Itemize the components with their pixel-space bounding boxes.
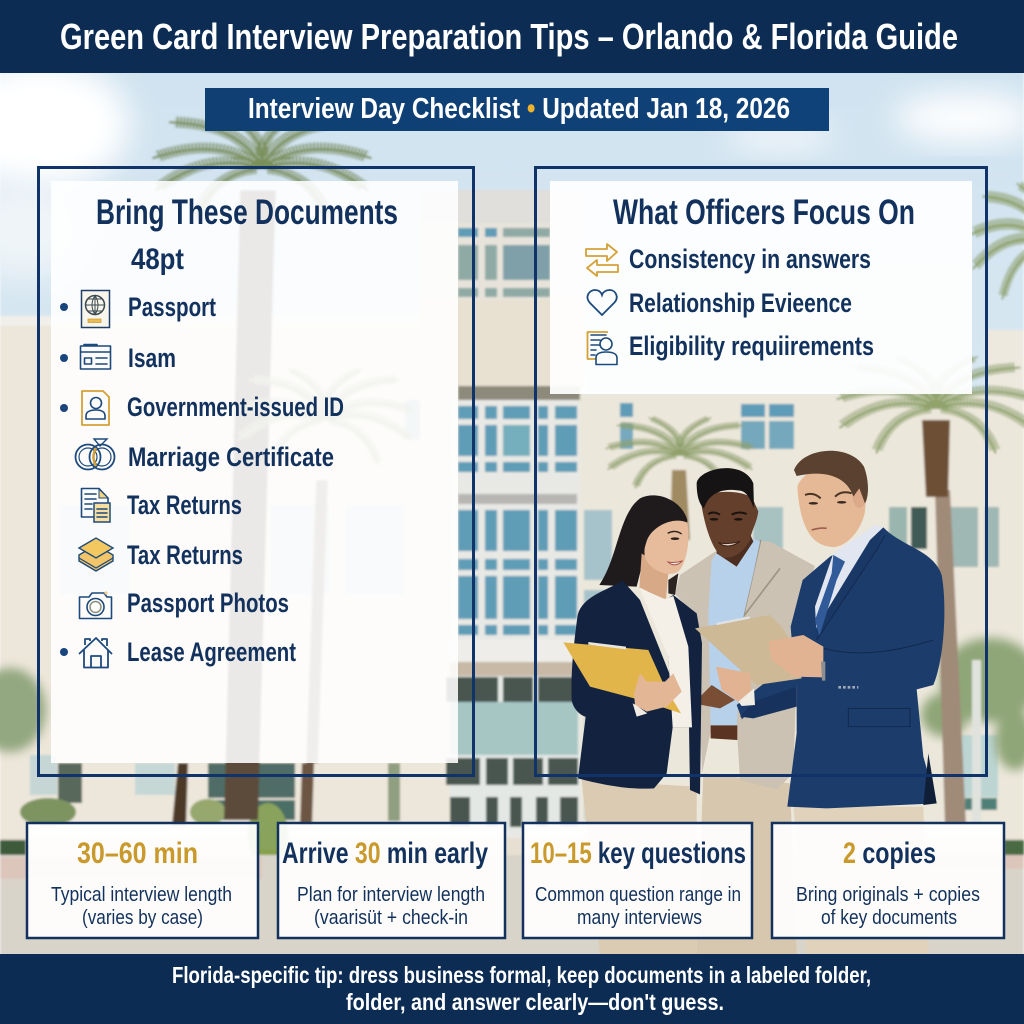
florida tip: Florida-specific tip: dress business formal, keep documents in a labeled folder, xyxy=(172,962,871,988)
stat value: Arrive 30 min early xyxy=(282,837,488,870)
item: consistency xyxy=(586,244,871,276)
subheading bar xyxy=(205,88,829,131)
left white panel backing xyxy=(51,181,458,763)
stat card: 2 copies xyxy=(772,823,1004,938)
stray label 48pt: 48pt xyxy=(131,243,184,276)
panel: bring these documents xyxy=(60,193,398,668)
header banner xyxy=(0,0,1024,73)
heading: documents: Bring These Documents xyxy=(96,193,398,232)
stat caption: (vaarisüt + check-in xyxy=(314,907,468,929)
item: isam xyxy=(60,343,176,373)
date line: Interview Day Checklist • Updated Jan 18, 2026 xyxy=(248,93,790,125)
ground xyxy=(0,838,1024,860)
item: government-issued id: Government-issued ID xyxy=(127,392,344,422)
item: lease agreement xyxy=(60,637,296,668)
stat card: 30-60 min xyxy=(27,823,258,938)
stat caption: Plan for interview length xyxy=(297,884,485,906)
item: isam: Isam xyxy=(128,343,176,373)
stat value: 10–15 key questions xyxy=(530,837,746,870)
heading: officers: What Officers Focus On xyxy=(613,193,915,232)
right palms xyxy=(670,470,690,540)
florida tip: folder, and answer clearly—don't guess. xyxy=(346,989,724,1015)
stat caption: Typical interview length xyxy=(51,884,232,906)
middle man xyxy=(675,468,815,954)
right wing xyxy=(580,394,1024,858)
item: passport xyxy=(60,290,216,328)
stat card: key questions xyxy=(523,823,752,938)
item: eligibility requirements xyxy=(588,331,874,364)
left wing xyxy=(0,316,470,856)
woman xyxy=(563,495,702,954)
item: marriage certificate: Marriage Certificate xyxy=(128,442,334,472)
item: eligibility requirements: Eligibility requiirements xyxy=(629,331,874,361)
item: marriage certificate xyxy=(76,439,334,472)
item: passport photos xyxy=(80,588,289,618)
stat caption: Bring originals + copies xyxy=(796,884,980,906)
left palm xyxy=(224,190,276,820)
item: tax returns xyxy=(82,488,242,522)
item: relationship evidence: Relationship Evieence xyxy=(629,288,852,318)
item: passport photos: Passport Photos xyxy=(127,588,289,618)
stat caption: (varies by case) xyxy=(82,907,203,929)
stat card: arrive early xyxy=(278,823,505,938)
three professionals reviewing documents xyxy=(563,451,944,954)
item: tax returns stack: Tax Returns xyxy=(127,540,243,570)
stat value: 30–60 min xyxy=(77,837,198,870)
stat caption: many interviews xyxy=(577,907,702,929)
frame: left section xyxy=(38,168,474,776)
shrubs and trees xyxy=(0,668,46,752)
right man xyxy=(695,451,944,954)
item: tax returns: Tax Returns xyxy=(127,490,242,520)
frame: right section xyxy=(536,168,986,776)
item: government-issued id xyxy=(60,391,344,425)
item: passport: Passport xyxy=(128,292,216,322)
entrance xyxy=(450,676,584,831)
stat caption: Common question range in xyxy=(535,884,741,906)
stat caption: of key documents xyxy=(821,907,957,929)
item: consistency: Consistency in answers xyxy=(629,244,871,274)
footer banner xyxy=(0,954,1024,1024)
center tower xyxy=(420,190,584,390)
panel: what officers focus on xyxy=(586,193,915,364)
right white panel backing xyxy=(550,181,972,394)
item: tax returns stack xyxy=(79,538,243,571)
item: relationship evidence xyxy=(587,288,852,318)
item: lease agreement: Lease Agreement xyxy=(127,637,296,667)
stat value: 2 copies xyxy=(843,837,936,870)
